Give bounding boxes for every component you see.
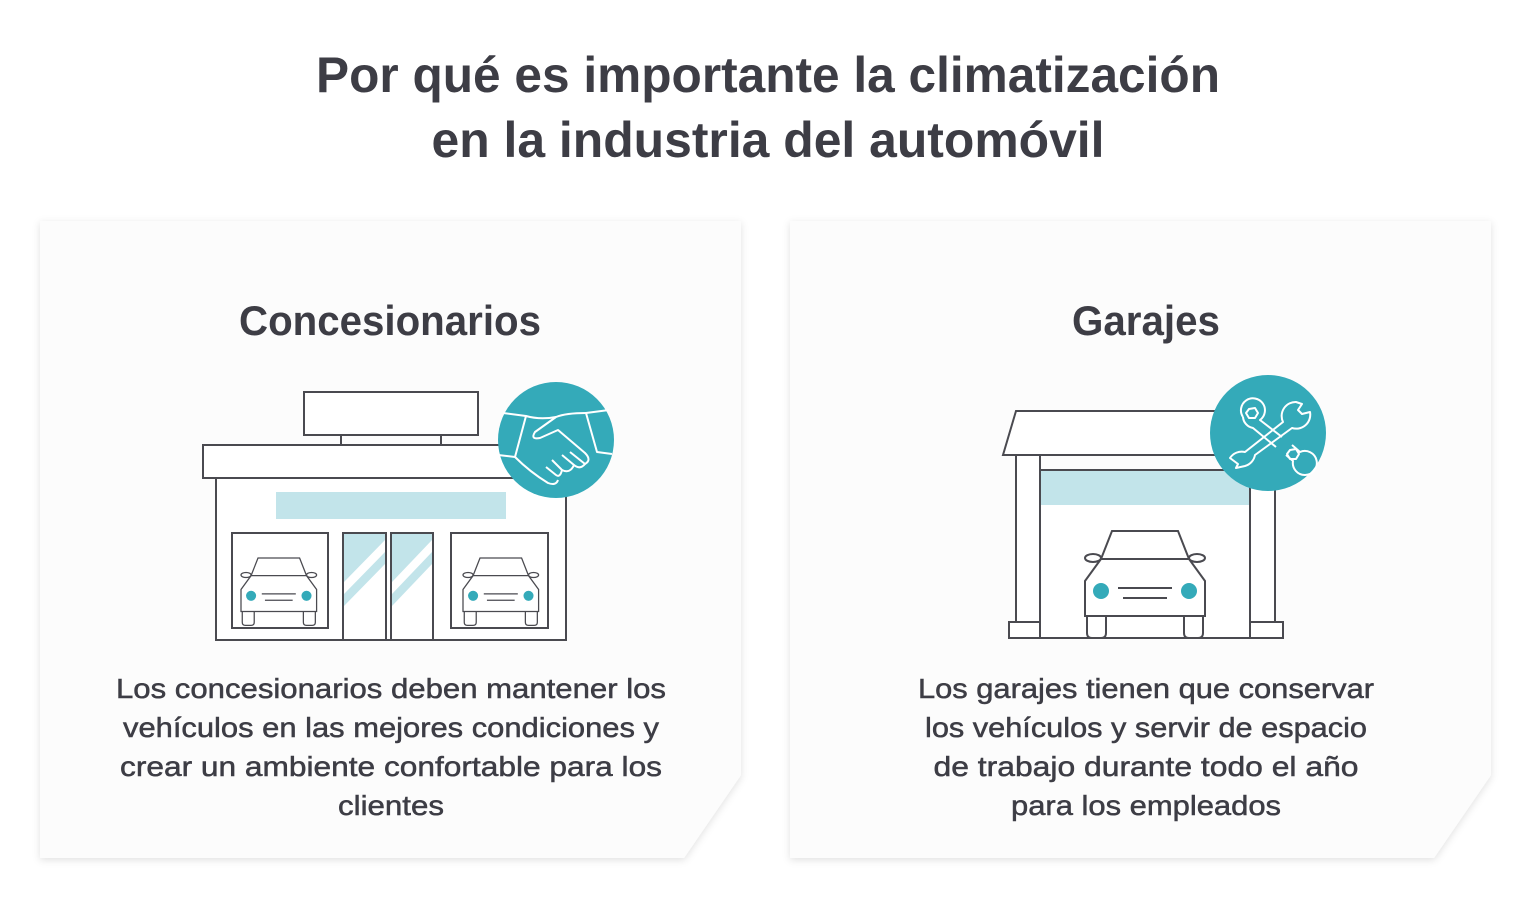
text: garajes description: Los garajes tienen que conservar <box>918 673 1374 704</box>
heading: Garajes: Garajes <box>1072 297 1220 344</box>
title: en la industria del automóvil <box>432 112 1104 168</box>
illustration: garage <box>1003 411 1283 638</box>
text: concesionarios description: vehículos en las mejores condiciones y <box>123 712 659 743</box>
text: garajes description: de trabajo durante todo el año <box>934 751 1358 782</box>
text: concesionarios description: Los concesionarios deben mantener los <box>116 673 666 704</box>
text: garajes description: para los empleados <box>1011 790 1281 821</box>
text: concesionarios description: clientes <box>338 790 444 821</box>
title: Por qué es importante la climatización <box>316 47 1220 103</box>
icon: handshake <box>498 382 614 498</box>
heading: Concesionarios: Concesionarios <box>239 297 541 344</box>
text: garajes description: los vehículos y servir de espacio <box>925 712 1367 743</box>
illustration: dealership <box>203 392 566 640</box>
text: concesionarios description: crear un ambiente confortable para los <box>120 751 662 782</box>
text: garajes description <box>918 673 1374 821</box>
icon: wrenches <box>1210 375 1326 491</box>
panel: garajes <box>790 221 1491 858</box>
text: concesionarios description <box>116 673 666 821</box>
title <box>316 47 1220 168</box>
panel: concesionarios <box>40 221 741 858</box>
